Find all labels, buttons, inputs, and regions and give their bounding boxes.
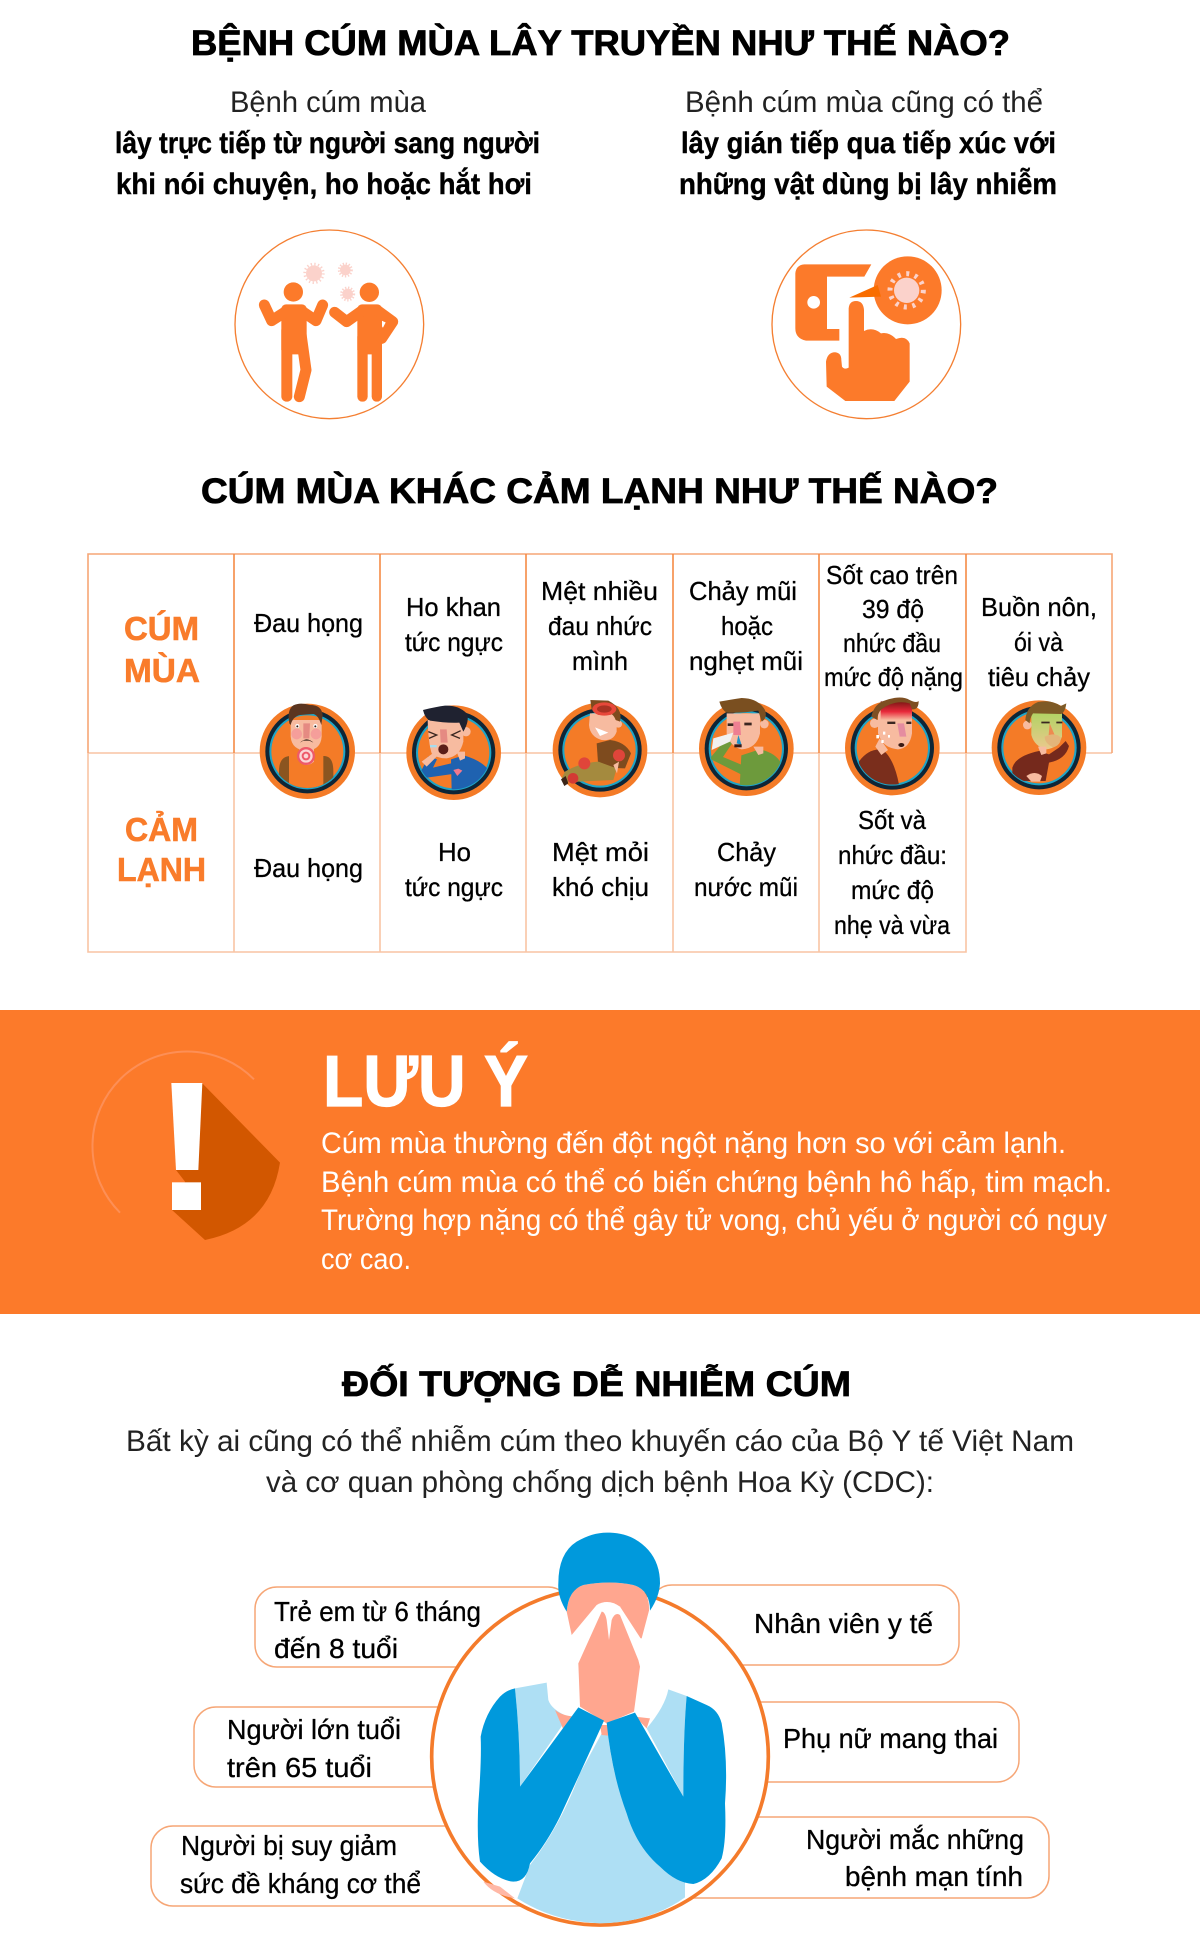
text block: direct transmission xyxy=(115,86,540,201)
flu symptoms text: mức độ nặng xyxy=(824,662,963,692)
text block: indirect transmission xyxy=(679,86,1057,201)
callout: weak immunity: sức đề kháng cơ thể xyxy=(180,1868,421,1899)
text block: indirect transmission: những vật dùng bị lây nhiễm xyxy=(679,167,1057,201)
cold symptoms text: nước mũi xyxy=(694,872,798,902)
callout: children: đến 8 tuổi xyxy=(274,1633,398,1664)
note body text xyxy=(321,1127,1112,1276)
cold symptoms text: mức độ xyxy=(851,875,934,905)
illustration: person sneezing into tissue xyxy=(432,1533,768,1925)
note body text: Trường hợp nặng có thể gây tử vong, chủ yếu ở người có nguy xyxy=(321,1204,1107,1237)
intro text: và cơ quan phòng chống dịch bệnh Hoa Kỳ (CDC): xyxy=(266,1466,934,1499)
icon: two people talking with viruses xyxy=(235,230,424,419)
callout: elderly: trên 65 tuổi xyxy=(227,1752,372,1783)
flu symptoms text: Mệt nhiều xyxy=(541,576,658,606)
callout: weak immunity xyxy=(151,1826,600,1906)
text block: direct transmission: lây trực tiếp từ người sang người xyxy=(115,127,540,160)
flu symptoms text: tiêu chảy xyxy=(988,662,1090,692)
title: how flu spreads: BỆNH CÚM MÙA LÂY TRUYỀN NHƯ THẾ NÀO? xyxy=(191,23,1010,63)
cold symptoms text: Mệt mỏi xyxy=(552,837,649,867)
text block: indirect transmission: lây gián tiếp qua tiếp xúc với xyxy=(681,127,1056,160)
cold symptoms text xyxy=(254,805,950,940)
note body text: cơ cao. xyxy=(321,1243,411,1276)
row label: common cold xyxy=(117,811,206,888)
flu symptoms text: hoặc xyxy=(721,611,773,641)
text block: direct transmission: khi nói chuyện, ho hoặc hắt hơi xyxy=(116,167,532,201)
cold symptoms text: Ho xyxy=(438,837,471,867)
flu symptoms text xyxy=(254,560,1097,692)
note body text: Cúm mùa thường đến đột ngột nặng hơn so với cảm lạnh. xyxy=(321,1127,1066,1160)
banner: note xyxy=(0,1010,1200,1314)
text block: indirect transmission: Bệnh cúm mùa cũng có thể xyxy=(685,86,1043,119)
cold symptoms text: nhẹ và vừa xyxy=(834,910,950,940)
row label: common cold: LẠNH xyxy=(117,851,206,888)
row label: seasonal flu: CÚM xyxy=(124,610,199,647)
cold symptoms text: Sốt và xyxy=(858,805,926,835)
callout: weak immunity: Người bị suy giảm xyxy=(181,1830,397,1861)
callout: chronic illness: Người mắc những xyxy=(806,1824,1024,1855)
comparison table grid xyxy=(88,554,1112,952)
title: at-risk groups: ĐỐI TƯỢNG DỄ NHIỄM CÚM xyxy=(342,1364,851,1404)
cold symptoms text: tức ngực xyxy=(405,872,503,902)
flu symptoms text: Ho khan xyxy=(406,592,501,622)
flu symptoms text: tức ngực xyxy=(405,627,503,657)
icon: nauseous man xyxy=(992,700,1086,795)
note heading: LƯU Ý xyxy=(323,1041,528,1122)
callout: health workers: Nhân viên y tế xyxy=(754,1608,933,1639)
flu symptoms text: mình xyxy=(572,646,628,676)
callout: chronic illness xyxy=(600,1817,1049,1898)
cold symptoms text: Chảy xyxy=(717,837,776,867)
row label: seasonal flu xyxy=(124,610,200,689)
row label: common cold: CẢM xyxy=(125,811,198,848)
intro text: Bất kỳ ai cũng có thể nhiễm cúm theo khuyến cáo của Bộ Y tế Việt Nam xyxy=(126,1425,1074,1458)
callout: pregnant women xyxy=(600,1702,1019,1782)
flu symptoms text: Đau họng xyxy=(254,608,363,638)
flu symptoms text: Sốt cao trên xyxy=(826,560,958,590)
callout: elderly xyxy=(194,1707,600,1787)
icon: coughing man xyxy=(406,705,501,800)
flu symptoms text: nghẹt mũi xyxy=(689,646,803,676)
callout: children: Trẻ em từ 6 tháng xyxy=(274,1596,481,1627)
icon: feverish man xyxy=(845,697,940,795)
cold symptoms text: khó chịu xyxy=(552,872,649,902)
note body text: Bệnh cúm mùa có thể có biến chứng bệnh hô hấp, tim mạch. xyxy=(321,1166,1112,1199)
flu symptoms text: Buồn nôn, xyxy=(981,592,1097,622)
flu symptoms text: nhức đầu xyxy=(843,628,941,658)
intro text xyxy=(126,1425,1074,1499)
icon: finger touching phone with virus xyxy=(772,230,961,419)
flu symptoms text: ói và xyxy=(1014,627,1063,657)
callout: health workers xyxy=(650,1585,959,1665)
callout: elderly: Người lớn tuổi xyxy=(227,1714,401,1745)
callout: children xyxy=(255,1587,570,1667)
flu symptoms text: đau nhức xyxy=(548,611,652,641)
row label: seasonal flu: MÙA xyxy=(124,652,200,689)
flu symptoms text: Chảy mũi xyxy=(689,576,797,606)
callout: chronic illness: bệnh mạn tính xyxy=(845,1861,1023,1892)
cold symptoms text: Đau họng xyxy=(254,853,363,883)
text block: direct transmission: Bệnh cúm mùa xyxy=(230,86,426,119)
icon: sore throat man xyxy=(260,704,355,799)
icon: runny nose man xyxy=(699,698,794,796)
icon: exclamation mark xyxy=(92,1051,280,1240)
callout: pregnant women: Phụ nữ mang thai xyxy=(783,1723,998,1754)
cold symptoms text: nhức đầu: xyxy=(838,840,947,870)
flu symptoms text: 39 độ xyxy=(862,594,924,624)
icon: aching body man xyxy=(553,700,647,797)
title: flu vs cold: CÚM MÙA KHÁC CẢM LẠNH NHƯ THẾ NÀO? xyxy=(201,471,998,511)
